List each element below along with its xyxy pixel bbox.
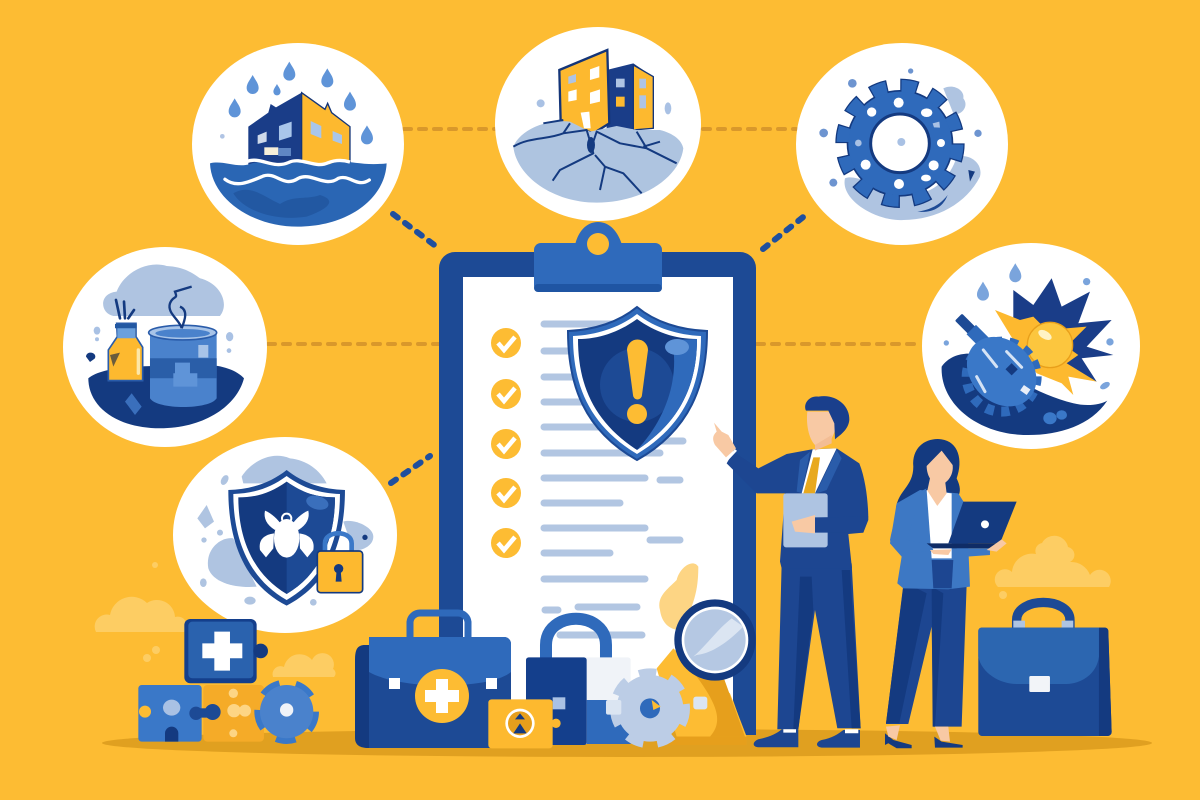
icon: puzzle pieces and gear — [138, 619, 313, 742]
icon: broken valve — [953, 314, 1050, 420]
dashed connectors — [268, 129, 922, 483]
panel: explosion circle — [922, 243, 1140, 449]
panel: chemical spill circle — [63, 247, 267, 447]
icon: large gear — [780, 30, 957, 201]
woman hair — [896, 439, 960, 508]
woman shoes — [885, 725, 963, 748]
man head — [807, 412, 838, 446]
icon: rain drops — [220, 62, 373, 144]
warning shield — [568, 307, 707, 460]
icon: padlock — [526, 619, 631, 745]
woman head — [927, 451, 953, 485]
icon: blue clouds — [197, 456, 373, 606]
icon: dark spill — [88, 365, 244, 428]
icon: small yellow case — [488, 699, 561, 748]
panel: gear failure circle — [780, 30, 1008, 245]
man legs — [777, 563, 861, 729]
icon: barrel — [149, 287, 217, 407]
clipboard clip — [534, 222, 662, 292]
man shoes — [754, 729, 860, 748]
icon: smoke cloud — [103, 265, 224, 316]
ground shadow — [102, 729, 1152, 757]
icon: briefcase — [978, 602, 1112, 736]
panel: clipboard — [439, 222, 756, 745]
man torso and arm — [727, 448, 868, 568]
clipboard paper — [463, 277, 733, 729]
icon: first aid kit — [355, 613, 511, 748]
woman legs — [886, 585, 967, 727]
icon: bottle — [108, 300, 143, 381]
icon: flood water — [210, 160, 387, 227]
woman jacket — [890, 490, 970, 589]
man hand — [713, 423, 736, 457]
icon: cracked buildings — [559, 50, 654, 133]
sack with flame — [657, 563, 747, 745]
man tablet — [783, 493, 868, 547]
figure: man presenting — [713, 396, 1017, 748]
icon: magnifying glass — [674, 599, 756, 681]
woman laptop — [927, 502, 1017, 557]
puzzle: medical — [184, 619, 268, 683]
panel: cyber bug circle — [173, 437, 397, 633]
exclamation mark — [627, 340, 648, 424]
icon: flooded building — [248, 93, 350, 167]
icon: bug shield — [228, 470, 345, 606]
icon: light gear — [606, 675, 707, 742]
panel: earthquake circle — [495, 27, 701, 221]
checklist lines — [544, 324, 683, 635]
background clouds — [95, 536, 1111, 677]
puzzle: blue — [138, 685, 221, 742]
gear: blue — [260, 685, 313, 738]
icon: cracked ground — [513, 120, 683, 203]
icon: debris — [845, 156, 980, 220]
icon: padlock — [317, 533, 363, 593]
icon: explosion burst — [1013, 278, 1113, 382]
icon: dark ground — [942, 354, 1107, 435]
checklist checks — [491, 328, 521, 558]
icon: bug — [260, 511, 314, 558]
panel: flood hazard circle — [192, 43, 404, 245]
clipboard board — [439, 252, 756, 745]
puzzle: yellow — [203, 685, 264, 742]
